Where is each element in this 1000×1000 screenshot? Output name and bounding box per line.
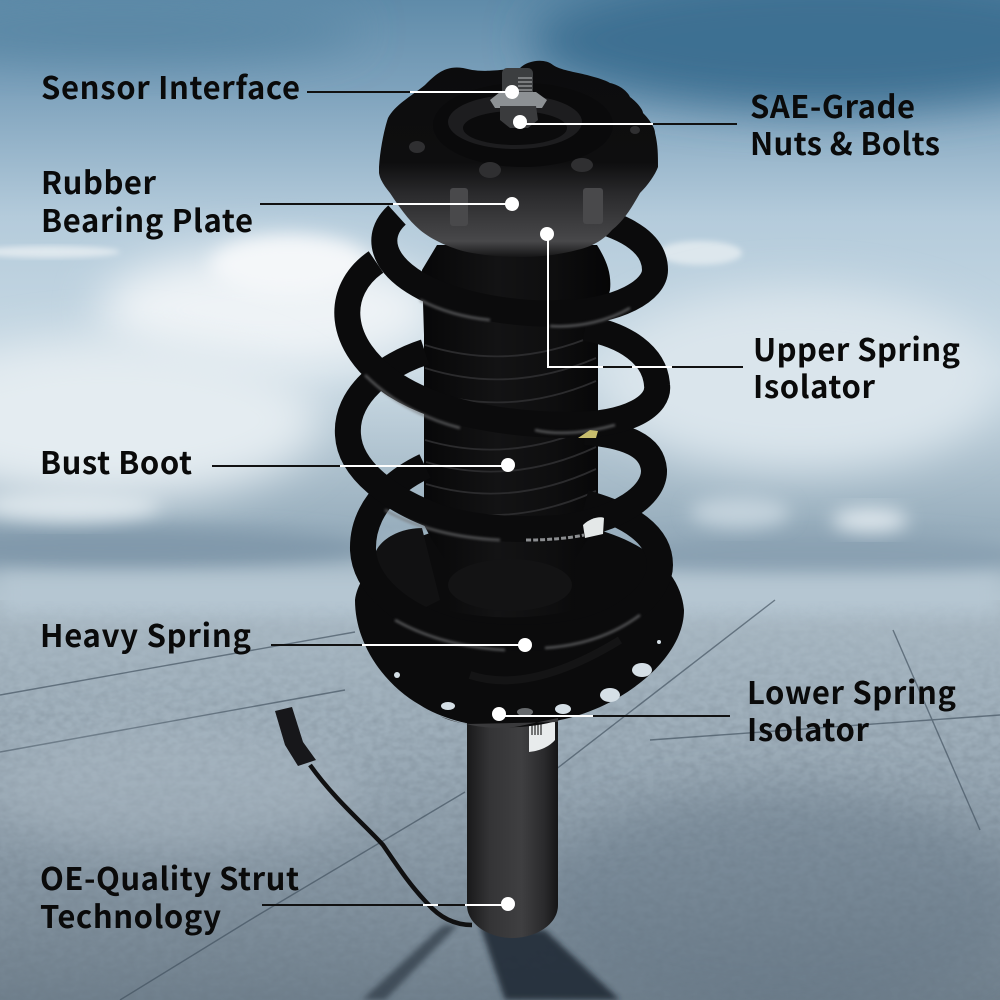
label: Lower Spring Isolator: Isolator bbox=[747, 705, 869, 750]
label: OE-Quality Strut Technology: OE-Quality Strut bbox=[40, 854, 299, 899]
label: Bust Boot bbox=[40, 438, 515, 483]
spring coil 3 bbox=[348, 352, 654, 540]
threaded stud and nut bbox=[490, 68, 547, 128]
strut assembly bbox=[275, 61, 684, 938]
shock absorber body bbox=[467, 712, 558, 938]
label: Bust Boot: Bust Boot bbox=[40, 438, 192, 483]
label: OE-Quality Strut Technology bbox=[40, 854, 515, 937]
label: Rubber Bearing Plate: Rubber bbox=[41, 158, 156, 203]
spring coil 1, top bbox=[384, 215, 655, 326]
label: SAE-Grade Nuts & Bolts: SAE-Grade bbox=[750, 82, 915, 127]
label: Sensor Interface: Sensor Interface bbox=[41, 63, 300, 108]
spring coil 4, lowest bbox=[363, 466, 660, 650]
label: SAE-Grade Nuts & Bolts: Nuts & Bolts bbox=[750, 119, 940, 164]
label: Upper Spring Isolator: Isolator bbox=[753, 362, 875, 407]
label: Upper Spring Isolator bbox=[540, 227, 960, 407]
top rubber mount bbox=[379, 61, 658, 257]
label: Rubber Bearing Plate bbox=[41, 158, 519, 241]
label: Lower Spring Isolator: Lower Spring bbox=[747, 668, 956, 713]
label: Upper Spring Isolator: Upper Spring bbox=[753, 325, 960, 370]
label: OE-Quality Strut Technology: Technology bbox=[40, 892, 221, 937]
label: Heavy Spring: Heavy Spring bbox=[40, 611, 251, 656]
background: paved ground bbox=[0, 575, 1000, 1000]
dust boot bbox=[422, 245, 610, 618]
spring coil 2 bbox=[347, 262, 657, 438]
label: Rubber Bearing Plate: Bearing Plate bbox=[41, 196, 253, 241]
white barcode sticker bbox=[529, 722, 555, 752]
background: clouds bbox=[0, 0, 1000, 579]
label: SAE-Grade Nuts & Bolts bbox=[513, 82, 940, 164]
label: Heavy Spring bbox=[40, 611, 532, 656]
lower spring seat plate bbox=[355, 520, 684, 728]
sensor wire and connector bbox=[275, 707, 472, 925]
label: Lower Spring Isolator bbox=[492, 668, 956, 750]
label: Sensor Interface bbox=[41, 63, 519, 108]
background: sky bbox=[0, 0, 1000, 620]
